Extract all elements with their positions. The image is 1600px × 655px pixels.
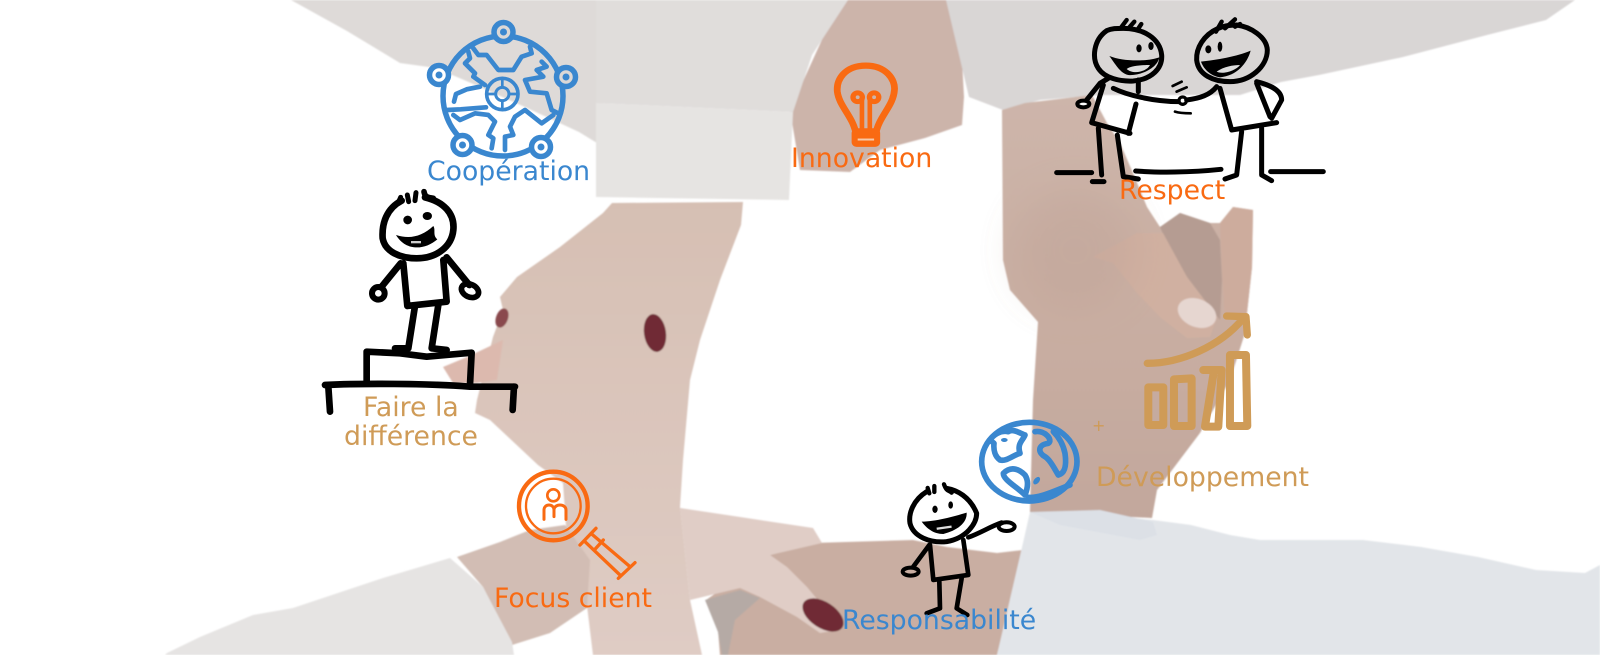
lighter finger [1220, 207, 1253, 320]
shading on right hand [1015, 190, 1135, 310]
label: Responsabilité: Responsabilité [842, 605, 1036, 636]
top right sleeve [946, 0, 1575, 110]
shirt cuff [596, 103, 793, 200]
top hand [790, 0, 964, 172]
label: Respect: Respect [1119, 175, 1225, 206]
Faire la différence: figure on podium and label [325, 192, 515, 452]
red fingernail lower [797, 592, 849, 638]
top left sleeve [291, 0, 620, 143]
small plus mark: + [1092, 416, 1105, 435]
lower left sleeve [165, 558, 514, 655]
small red nail [493, 307, 511, 329]
label: Développement: Développement [1096, 462, 1309, 493]
pink finger [443, 340, 503, 383]
lower brown forearm [706, 540, 1023, 655]
top middle sleeve [596, 0, 848, 112]
woman's hand over forearm [680, 508, 838, 633]
red fingernail upper [641, 313, 669, 353]
lower left wrist [457, 525, 590, 645]
right sleeve cuff highlight [1030, 510, 1157, 540]
Innovation: light bulb icon and label [791, 66, 932, 174]
icon: rising bar chart with arrow [1147, 316, 1247, 427]
icon: figure pointing at globe [903, 484, 1015, 615]
thumb [1093, 233, 1217, 338]
label: Faire la différence: différence [344, 421, 478, 452]
label: Innovation: Innovation [791, 143, 932, 174]
Respect: handshake figures and label [1057, 19, 1323, 206]
Focus client: magnifier icon and label [494, 472, 652, 614]
icon: light bulb [837, 66, 895, 147]
icon: magnifier with person [519, 472, 635, 578]
icon: cooperation gear [430, 22, 576, 156]
dark finger [1160, 213, 1222, 320]
icon: two figures shaking hands [1057, 19, 1323, 182]
label: Faire la différence: Faire la [363, 392, 459, 423]
left hand and forearm [475, 202, 743, 655]
right lower sleeve [997, 512, 1600, 655]
thumb nail [1173, 293, 1221, 333]
icon: figure on podium [325, 192, 515, 412]
label: Coopération: Coopération [427, 156, 590, 187]
label: Focus client: Focus client [494, 583, 652, 614]
grey knuckle [705, 590, 760, 655]
icon: globe [982, 422, 1077, 501]
upper right hand [1002, 95, 1253, 518]
Coopération: gear network icon and label [427, 22, 590, 187]
Développement: growth chart icon and label [1092, 316, 1309, 493]
Responsabilité: figure with globe and label [842, 422, 1077, 636]
